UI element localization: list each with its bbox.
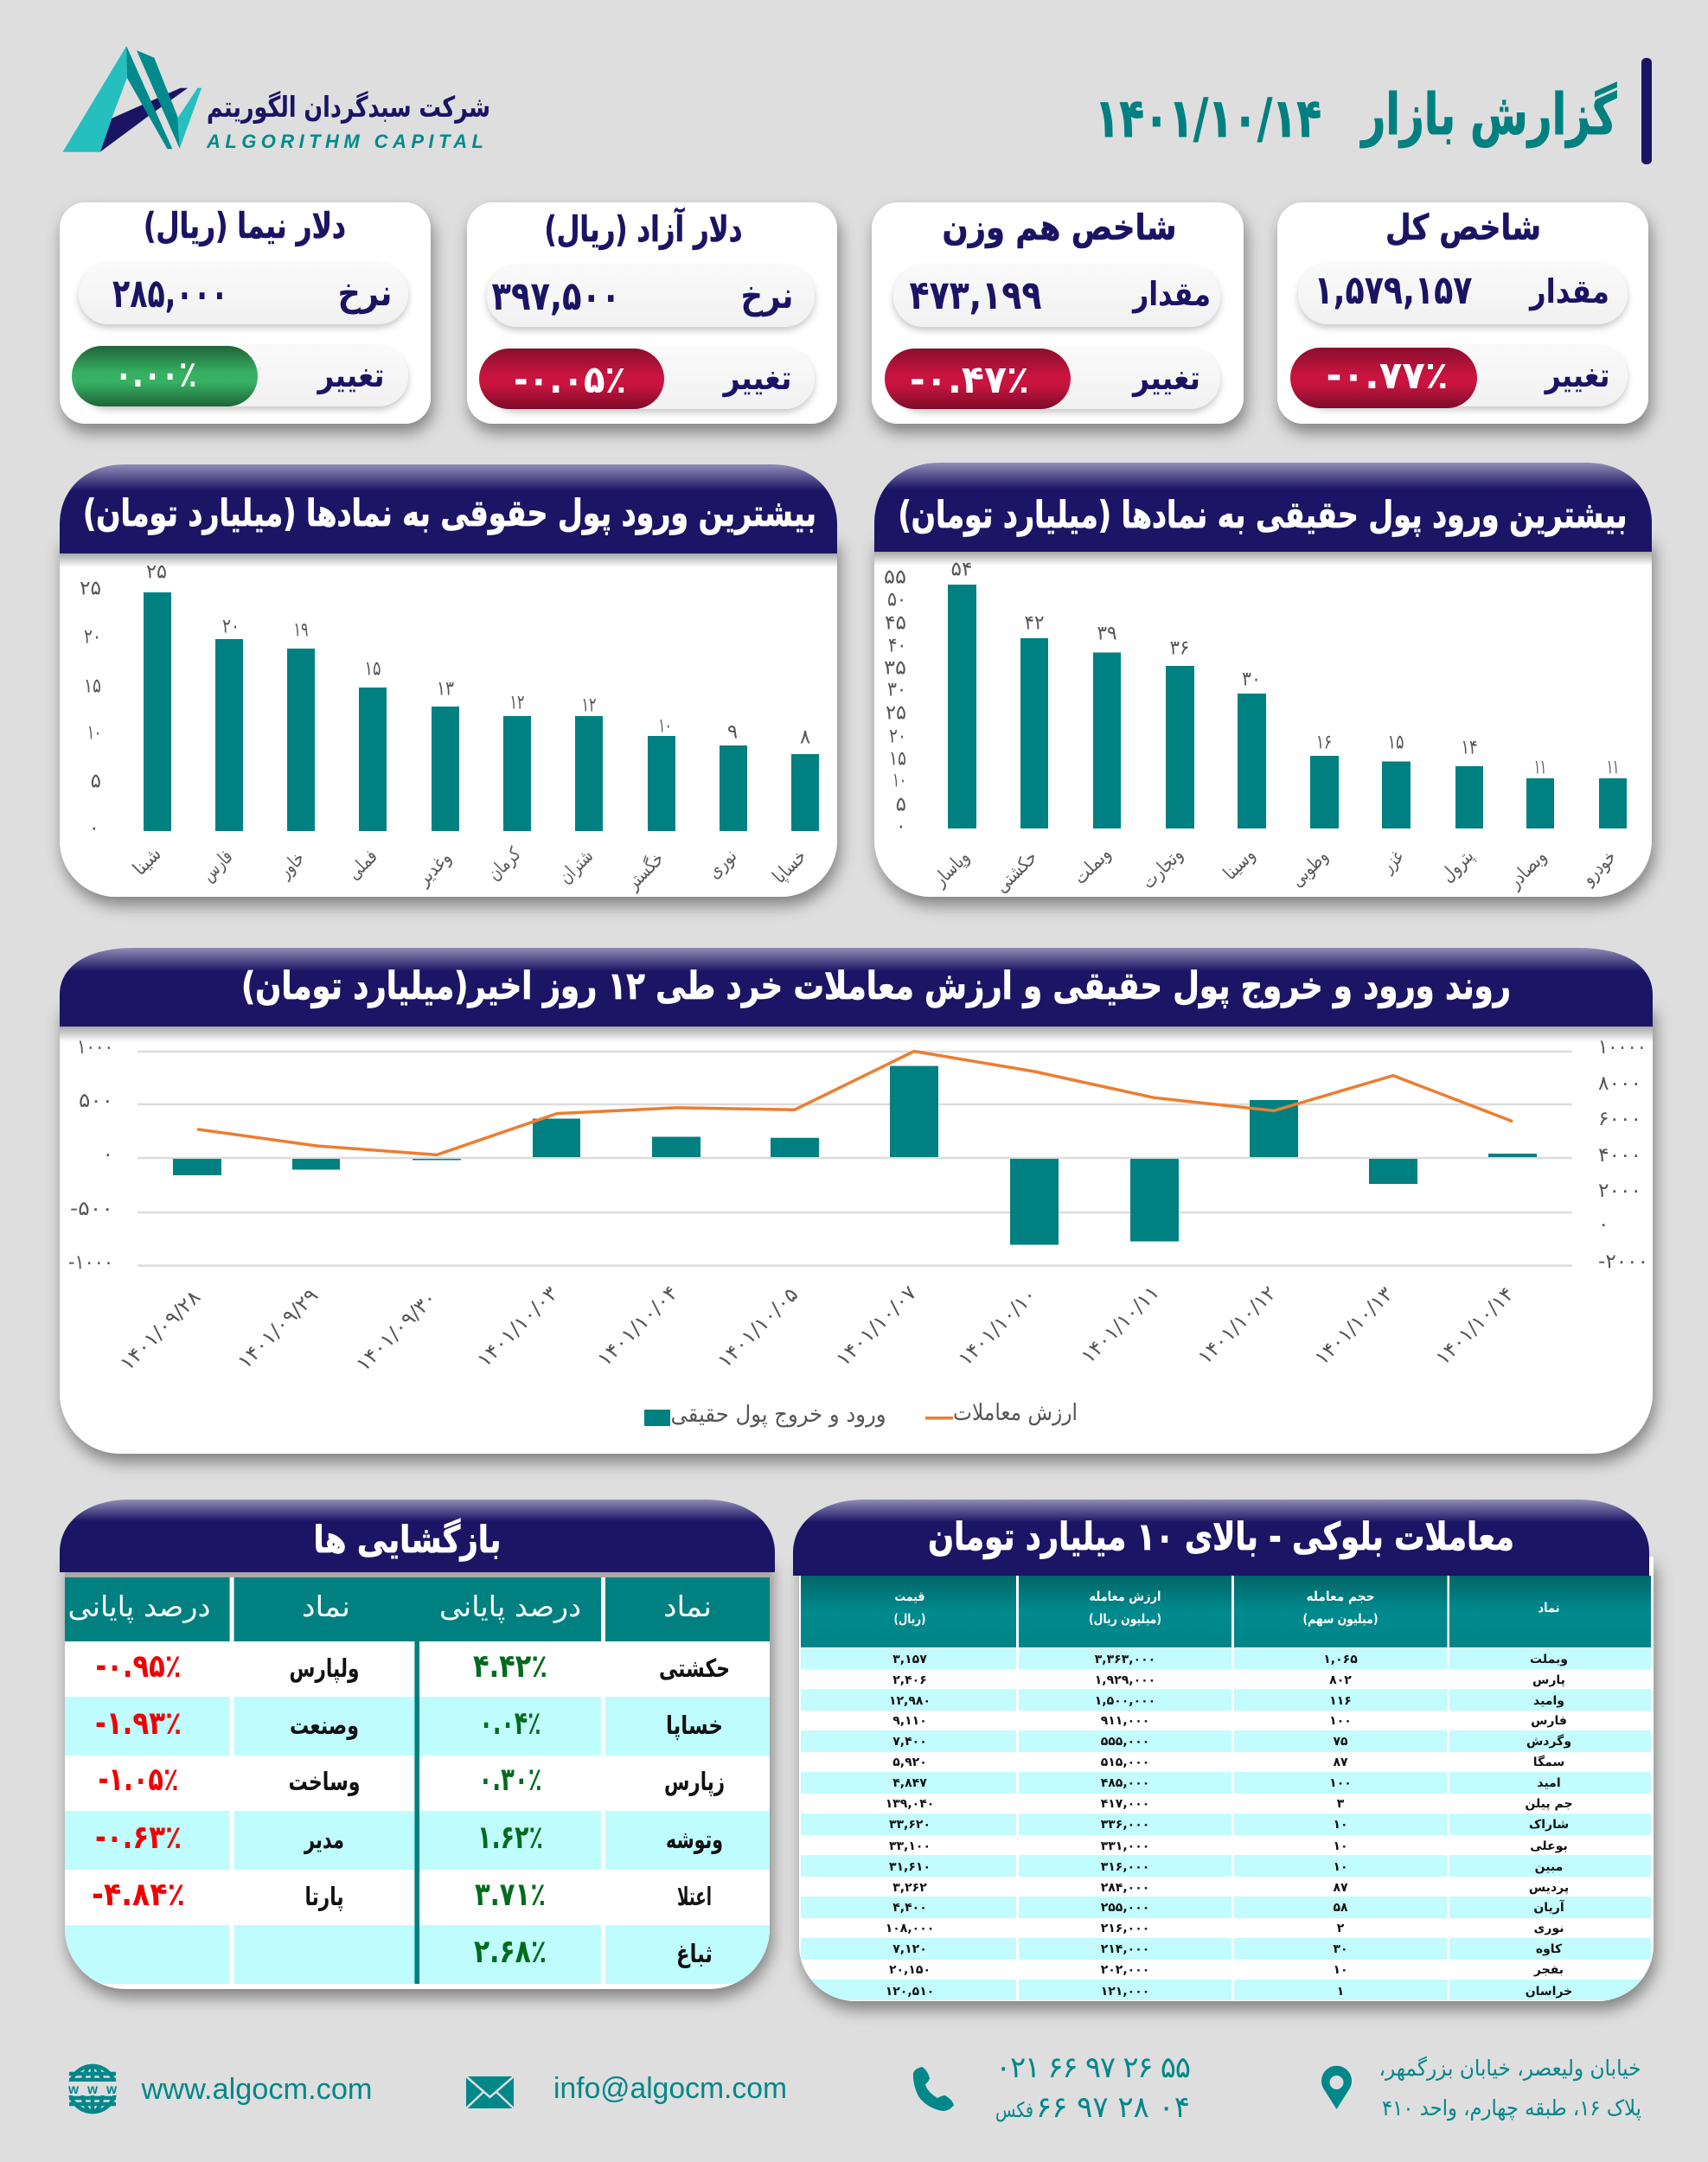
row: سمگا: ۵,۹۲۰ (892, 1756, 927, 1769)
panel heading: بیشترین ورود پول حقوقی به نمادها (میلیارد تومان) (83, 492, 816, 535)
x axis symbols: غزر (1377, 847, 1408, 878)
line: trade value (197, 1052, 1513, 1155)
y axis: ۵ (896, 794, 906, 816)
y axis: ۵۵ (884, 566, 906, 588)
y axis: ۱۵ (84, 675, 101, 697)
row: پارس: ۸۰۲ (1329, 1673, 1352, 1687)
cyan row stripes (801, 1648, 1651, 2000)
value row: ۱,۵۷۹,۱۵۷ (1315, 266, 1472, 313)
value labels: ۳۹ (1097, 623, 1117, 645)
row: پردیس (892, 1881, 1569, 1895)
row: وامید: ۱,۵۰۰,۰۰۰ (1095, 1694, 1155, 1708)
row: بوعلی: ۱۰ (1333, 1839, 1348, 1853)
table header: نماد (302, 1590, 350, 1623)
logo mark (62, 46, 202, 152)
row: کاوه: ۲۱۴,۰۰۰ (1101, 1942, 1149, 1956)
address: پلاک ۱۶، طبقه چهارم، واحد ۴۱۰ (1382, 2095, 1641, 2121)
y axis: ۳۰ (887, 678, 906, 700)
row: کاوه: ۳۰ (1333, 1942, 1348, 1956)
y axis: ۵۰ (887, 588, 906, 611)
y axis: ۱۵ (889, 747, 906, 770)
x axis symbols: شینا (129, 843, 166, 880)
row: خراسان (886, 1985, 1572, 1999)
right axis: ۰ (1598, 1213, 1609, 1236)
row: مبین: ۳۱,۶۱۰ (889, 1860, 931, 1874)
row: فارس: ۹۱۱,۰۰۰ (1101, 1714, 1149, 1728)
row: فارس: ۹,۱۱۰ (892, 1714, 927, 1728)
row 1: ولپارس (289, 1653, 360, 1684)
table header: درصد پایانی (439, 1590, 581, 1623)
row: وامید: ۱۲,۹۸۰ (889, 1694, 931, 1708)
x axis symbols: وبملت (1070, 843, 1116, 889)
rate row: نرخ (740, 274, 794, 317)
table header (65, 1577, 770, 1641)
table header: قیمت (894, 1589, 925, 1604)
value labels: ۱۹ (294, 619, 308, 642)
row: بوعلی: ۳۳۱,۰۰۰ (1101, 1839, 1149, 1853)
row: امید: ۴۸۵,۰۰۰ (1101, 1776, 1149, 1790)
panel: market openings table (60, 1500, 775, 1989)
row: امید: امید (1537, 1776, 1561, 1790)
value row: ۴۷۳,۱۹۹ (910, 272, 1041, 318)
change row (885, 349, 1220, 409)
x axis dates: ۱۴۰۱/۱۰/۱۲ (1194, 1282, 1281, 1369)
row: خراسان: ۱۲۱,۰۰۰ (1101, 1985, 1149, 1999)
value labels: ۱۴ (1462, 737, 1477, 759)
row 4: ۱.۶۲٪ (477, 1819, 543, 1856)
row 5: -۴.۸۴٪ (92, 1876, 185, 1913)
table header: درصد پایانی (67, 1590, 211, 1623)
email: info@algocm.com (553, 2072, 787, 2105)
row: وبملت: ۳,۳۶۳,۰۰۰ (1095, 1653, 1155, 1666)
row: آریان: ۴,۴۰۰ (892, 1901, 927, 1915)
table header: (میلیون ریال) (1089, 1611, 1161, 1627)
row: امید: ۴,۸۴۷ (892, 1776, 927, 1790)
x axis symbols: وتجارت (1138, 844, 1187, 893)
row 4: وتوشه (666, 1825, 723, 1854)
row: پارس (892, 1674, 1564, 1686)
row 6: ۲.۶۸٪ (474, 1933, 547, 1970)
cyan row stripes (65, 1697, 770, 1984)
x axis dates: ۱۴۰۱/۰۹/۲۹ (233, 1284, 323, 1373)
rate row (79, 264, 408, 324)
row 3: زپارس (664, 1767, 725, 1797)
footer (67, 2050, 1641, 2125)
value labels: ۲۵ (146, 560, 167, 583)
row: فارس: ۱۰۰ (1329, 1714, 1352, 1728)
value row (893, 265, 1220, 327)
row: وگردش: ۵۵۵,۰۰۰ (1101, 1735, 1149, 1749)
icon: globe: www (67, 2082, 118, 2097)
fax number: ۶۶ ۹۷ ۲۸ ۰۴ (1036, 2090, 1190, 2125)
row: آریان: ۵۸ (1333, 1901, 1348, 1915)
value row: مقدار (1528, 272, 1609, 310)
x axis dates: ۱۴۰۱/۱۰/۱۱ (1078, 1282, 1164, 1368)
change row: تغییر (1544, 356, 1610, 394)
row: نوری: ۱۰۸,۰۰۰ (886, 1922, 934, 1935)
row: سمگا (892, 1755, 1564, 1768)
row: وگردش: ۷,۴۰۰ (892, 1735, 927, 1749)
row 1: ۴.۴۲٪ (473, 1647, 547, 1685)
rate row: ۳۹۷,۵۰۰ (491, 272, 621, 319)
row: وامید: ۱۱۶ (1329, 1694, 1352, 1708)
legend: ورود و خروج پول حقیقی (671, 1402, 886, 1428)
rate row: نرخ (337, 272, 393, 315)
panel heading: روند ورود و خروج پول حقیقی و ارزش معاملات خرد طی ۱۲ روز اخیر(میلیارد تومان) (241, 964, 1511, 1008)
company name persian: شرکت سبدگردان الگوریتم (207, 90, 490, 125)
card heading: شاخص هم وزن (943, 207, 1176, 249)
rate row (487, 265, 815, 327)
row: آریان: آریان (1533, 1899, 1565, 1915)
rate row: ۲۸۵,۰۰۰ (112, 270, 228, 317)
right axis (1598, 1036, 1648, 1273)
y axis: ۲۵ (886, 702, 906, 725)
value labels: ۱۱ (1534, 756, 1546, 778)
table (801, 1576, 1651, 2000)
left axis: ۰ (103, 1143, 113, 1166)
x axis dates: ۱۴۰۱/۱۰/۱۳ (1311, 1283, 1398, 1370)
row: سمگا: سمگا (1533, 1755, 1564, 1769)
row: جم پیلن: ۴۱۷,۰۰۰ (1101, 1797, 1149, 1811)
row: مبین: مبین (1535, 1860, 1563, 1874)
value labels: ۱۱ (1607, 756, 1619, 778)
bars (144, 592, 819, 831)
row: کاوه: ۷,۱۲۰ (892, 1942, 927, 1956)
value labels: ۱۰ (659, 714, 671, 737)
right axis: -۲۰۰۰ (1598, 1251, 1648, 1273)
x axis dates: ۱۴۰۱/۱۰/۰۷ (832, 1282, 921, 1371)
row 1: حکشتی (659, 1653, 730, 1683)
row: سمگا: ۵۱۵,۰۰۰ (1101, 1756, 1149, 1769)
value labels (951, 559, 1619, 778)
x axis symbols: وپاسار (929, 847, 974, 892)
card heading: شاخص کل (1385, 207, 1541, 248)
row: وبملت (892, 1653, 1567, 1666)
row: کاوه (892, 1942, 1563, 1956)
card heading: دلار نیما (ریال) (144, 205, 346, 246)
icon: envelope (466, 2076, 514, 2108)
x axis symbols: نوری (703, 845, 741, 883)
value labels: ۲۰ (222, 616, 240, 638)
table header: (ریال) (894, 1611, 925, 1627)
row: خراسان: ۱۲۰,۵۱۰ (886, 1985, 934, 1999)
row: آریان (892, 1899, 1565, 1915)
left axis: ۵۰۰ (79, 1090, 113, 1112)
row: فارس (892, 1716, 1566, 1728)
x axis symbols: کرمان (483, 843, 526, 885)
panel: top legal money inflow chart (60, 464, 837, 897)
row: نوری: نوری (1534, 1922, 1564, 1935)
x axis dates: ۱۴۰۱/۱۰/۱۴ (1432, 1283, 1519, 1370)
panel: equal weight index card (872, 202, 1244, 424)
row: نوری: ۲ (1337, 1922, 1345, 1935)
value labels: ۱۵ (365, 657, 381, 680)
change row: تغییر (722, 359, 792, 397)
row: مبین: ۳۱۶,۰۰۰ (1101, 1860, 1149, 1874)
legend: ارزش معاملات (953, 1400, 1078, 1426)
row: بفجر: ۲۰۲,۰۰۰ (1101, 1963, 1149, 1977)
row: وگردش: ۷۵ (1333, 1735, 1348, 1749)
x axis symbols: وسینا (1219, 844, 1260, 885)
company name latin: ALGORITHM CAPITAL (206, 131, 483, 152)
row: نوری (886, 1922, 1564, 1935)
row: خراسان: ۱ (1337, 1985, 1344, 1999)
row: شاراک: ۳۳۶,۰۰۰ (1101, 1818, 1149, 1832)
card heading: دلار آزاد (ریال) (545, 208, 742, 250)
x axis symbols: خگستر (622, 848, 668, 894)
row: بوعلی (889, 1839, 1568, 1853)
row: جم پیلن: ۳ (1337, 1797, 1345, 1811)
row: بفجر (889, 1963, 1564, 1977)
row: وامید: وامید (1533, 1694, 1564, 1708)
row 3 (99, 1769, 724, 1797)
row: پردیس: ۸۷ (1333, 1881, 1348, 1895)
panel: free dollar card (467, 202, 837, 424)
value labels: ۸ (800, 726, 810, 749)
row: آریان: ۲۵۵,۰۰۰ (1101, 1901, 1149, 1915)
row: شاراک: ۳۳,۶۲۰ (889, 1818, 931, 1832)
y axis: ۱۰ (87, 721, 101, 744)
row 6 (474, 1941, 711, 1968)
row: وبملت: ۱,۰۶۵ (1323, 1653, 1358, 1666)
x axis symbols: حکشتی (991, 847, 1042, 898)
row: بفجر: ۱۰ (1333, 1963, 1348, 1977)
y axis: ۰ (896, 815, 906, 837)
address (1379, 2056, 1641, 2121)
x axis dates: ۱۴۰۱/۰۹/۳۰ (352, 1287, 441, 1376)
table header: نماد (663, 1590, 712, 1623)
row: بوعلی: ۳۳,۱۰۰ (889, 1839, 931, 1853)
icon: phone (913, 2067, 954, 2111)
phone number: ۰۲۱ ۶۶ ۹۷ ۲۶ ۵۵ (995, 2050, 1191, 2085)
panel heading: بازگشایی ها (313, 1518, 502, 1562)
bars: real money flow (173, 1066, 1537, 1244)
table (65, 1577, 770, 1984)
change row: -۰.۰۵٪ (514, 358, 626, 402)
value labels: ۴۲ (1024, 612, 1045, 635)
row: شاراک: شاراک (1529, 1818, 1569, 1832)
row: پارس: پارس (1532, 1673, 1565, 1687)
row: جم پیلن: ۱۳۹,۰۴۰ (886, 1797, 934, 1811)
row: بوعلی: بوعلی (1530, 1839, 1568, 1853)
x axis dates: ۱۴۰۱/۱۰/۰۳ (473, 1282, 562, 1372)
change row (479, 349, 815, 409)
left axis: -۱۰۰۰ (68, 1251, 113, 1274)
value labels: ۳۰ (1242, 668, 1261, 690)
y axis: ۴۵ (885, 612, 906, 635)
y axis: ۲۰ (889, 725, 906, 747)
left axis: ۱۰۰۰ (77, 1036, 113, 1059)
bars (948, 585, 1627, 828)
row: پردیس: ۲۸۴,۰۰۰ (1101, 1881, 1149, 1895)
row: شاراک: ۱۰ (1333, 1818, 1348, 1832)
row: نوری: ۲۱۶,۰۰۰ (1101, 1922, 1149, 1935)
change row: تغییر (317, 356, 384, 394)
address: خیابان ولیعصر، خیابان بزرگمهر، (1379, 2056, 1641, 2082)
row: خراسان: خراسان (1526, 1985, 1572, 1999)
x axis symbols: پترول (1436, 845, 1478, 886)
y axis: ۳۵ (884, 657, 906, 680)
value labels: ۱۵ (1387, 732, 1404, 754)
panel: top real money inflow chart (874, 463, 1652, 898)
value labels: ۱۲ (510, 692, 524, 714)
table header: نماد (1538, 1600, 1560, 1615)
value labels: ۳۶ (1169, 636, 1190, 659)
row 4: مدیر (304, 1825, 344, 1854)
row: مبین: ۱۰ (1333, 1860, 1348, 1874)
value labels: ۱۳ (437, 678, 454, 700)
change row: -۰.۷۷٪ (1327, 354, 1448, 398)
x axis dates: ۱۴۰۱/۱۰/۰۴ (593, 1282, 682, 1371)
change row (72, 346, 408, 406)
row: جم پیلن (887, 1799, 1572, 1811)
right axis: ۲۰۰۰ (1598, 1180, 1641, 1202)
y axis: ۲۰ (84, 626, 101, 649)
row: پارس: ۲,۴۰۶ (892, 1673, 927, 1687)
value labels: ۵۴ (951, 559, 972, 581)
row 5 (93, 1884, 711, 1911)
panel: block trades table (793, 1500, 1654, 2001)
row: جم پیلن: جم پیلن (1525, 1797, 1573, 1811)
y axis: ۵ (91, 770, 101, 792)
row: پردیس: پردیس (1529, 1881, 1569, 1895)
right axis: ۱۰۰۰۰ (1598, 1036, 1647, 1059)
x axis dates: ۱۴۰۱/۰۹/۲۸ (116, 1286, 205, 1375)
row 3: ۰.۳۰٪ (479, 1761, 541, 1798)
value labels: ۱۲ (581, 694, 597, 716)
row: فارس: فارس (1531, 1714, 1567, 1728)
x axis dates (116, 1282, 1519, 1376)
row 4 (97, 1827, 721, 1854)
x axis symbols: وغدیر (413, 848, 456, 891)
left axis (68, 1036, 113, 1274)
value row: مقدار (1131, 275, 1211, 313)
right axis: ۶۰۰۰ (1598, 1108, 1641, 1130)
x axis symbols (129, 843, 811, 894)
table header: (میلیون سهم) (1302, 1611, 1379, 1627)
x axis symbols: فارس (197, 846, 237, 886)
row: وگردش: وگردش (1526, 1734, 1571, 1749)
table header: ارزش معامله (1090, 1589, 1161, 1604)
x axis dates: ۱۴۰۱/۱۰/۰۵ (713, 1283, 803, 1372)
x axis symbols (929, 843, 1621, 898)
y axis: ۱۰ (892, 770, 906, 792)
icon: globe (67, 2065, 118, 2114)
row 4: -۰.۶۳٪ (95, 1819, 182, 1856)
change row: تغییر (1131, 359, 1200, 397)
value labels: ۹ (727, 721, 738, 744)
icon: location pin (1321, 2066, 1352, 2109)
row: پردیس: ۳,۲۶۲ (892, 1881, 927, 1895)
x axis symbols: خاور (274, 848, 310, 883)
title accent bar (1641, 58, 1652, 164)
row 2: وصنعت (290, 1711, 359, 1740)
row 1: -۰.۹۵٪ (95, 1647, 182, 1685)
website: www.algocm.com (140, 2073, 372, 2106)
legend (644, 1400, 1078, 1428)
right axis: ۴۰۰۰ (1598, 1144, 1641, 1167)
row: کاوه: کاوه (1536, 1942, 1563, 1956)
row 5: پارتا (304, 1882, 344, 1912)
row: پارس: ۱,۹۲۹,۰۰۰ (1095, 1673, 1155, 1687)
x axis dates: ۱۴۰۱/۱۰/۱۰ (955, 1284, 1041, 1371)
row: شاراک (889, 1818, 1569, 1832)
x axis symbols: فملی (343, 846, 382, 885)
right axis: ۸۰۰۰ (1598, 1072, 1641, 1095)
left axis: -۵۰۰ (70, 1198, 113, 1220)
row: وبملت: ۳,۱۵۷ (892, 1653, 927, 1666)
row: وبملت: وبملت (1530, 1653, 1568, 1666)
row: مبین (889, 1860, 1563, 1874)
row: امید: ۱۰۰ (1329, 1776, 1352, 1790)
row 2: -۱.۹۳٪ (95, 1705, 182, 1742)
row 3: وساخت (289, 1767, 360, 1796)
row 3: -۱.۰۵٪ (99, 1761, 178, 1798)
row 5: اعتلا (677, 1882, 712, 1911)
value labels: ۱۶ (1316, 732, 1332, 754)
change row: -۰.۴۷٪ (910, 358, 1029, 402)
y axis: ۰ (89, 816, 99, 839)
row: وامید (891, 1695, 1564, 1707)
change row (1290, 346, 1628, 408)
row 6: ثباغ (676, 1939, 713, 1968)
row: وگردش (892, 1734, 1571, 1749)
y axis (80, 578, 101, 839)
value labels (146, 560, 810, 749)
row: بفجر: بفجر (1533, 1963, 1564, 1977)
row 2: خساپا (666, 1711, 723, 1741)
grid lines (138, 1052, 1572, 1266)
panel heading: معاملات بلوکی - بالای ۱۰ میلیارد تومان (928, 1515, 1514, 1559)
value row (1298, 264, 1628, 324)
y axis: ۴۰ (888, 635, 906, 657)
panel: total index card (1277, 202, 1648, 424)
row: بفجر: ۲۰,۱۵۰ (889, 1963, 931, 1977)
table header: حجم معامله (1306, 1589, 1375, 1604)
report date: ۱۴۰۱/۱۰/۱۴ (1095, 86, 1321, 150)
row 2: ۰.۰۴٪ (479, 1705, 541, 1742)
x axis symbols: وبصادر (1504, 846, 1551, 893)
row 1 (97, 1656, 728, 1683)
y axis (884, 566, 906, 837)
row: امید (892, 1778, 1560, 1788)
row 2 (97, 1713, 721, 1740)
center divider (414, 1641, 419, 1984)
row: سمگا: ۸۷ (1333, 1756, 1348, 1769)
x axis symbols: وطوبی (1287, 846, 1333, 892)
fax number: فکس (995, 2098, 1033, 2122)
table header (801, 1576, 1651, 1647)
logo (62, 46, 490, 152)
x axis symbols: خودرو (1577, 847, 1621, 890)
row 5: ۳.۷۱٪ (475, 1876, 546, 1913)
change row: ۰.۰۰٪ (114, 353, 197, 395)
panel: nima dollar card (60, 202, 431, 424)
panel: retail money flow trend chart (60, 948, 1653, 1454)
y axis: ۲۵ (80, 578, 101, 600)
x axis symbols: شتران (555, 846, 598, 888)
x axis symbols: خساپا (769, 846, 811, 888)
title: گزارش بازار (1359, 81, 1617, 148)
